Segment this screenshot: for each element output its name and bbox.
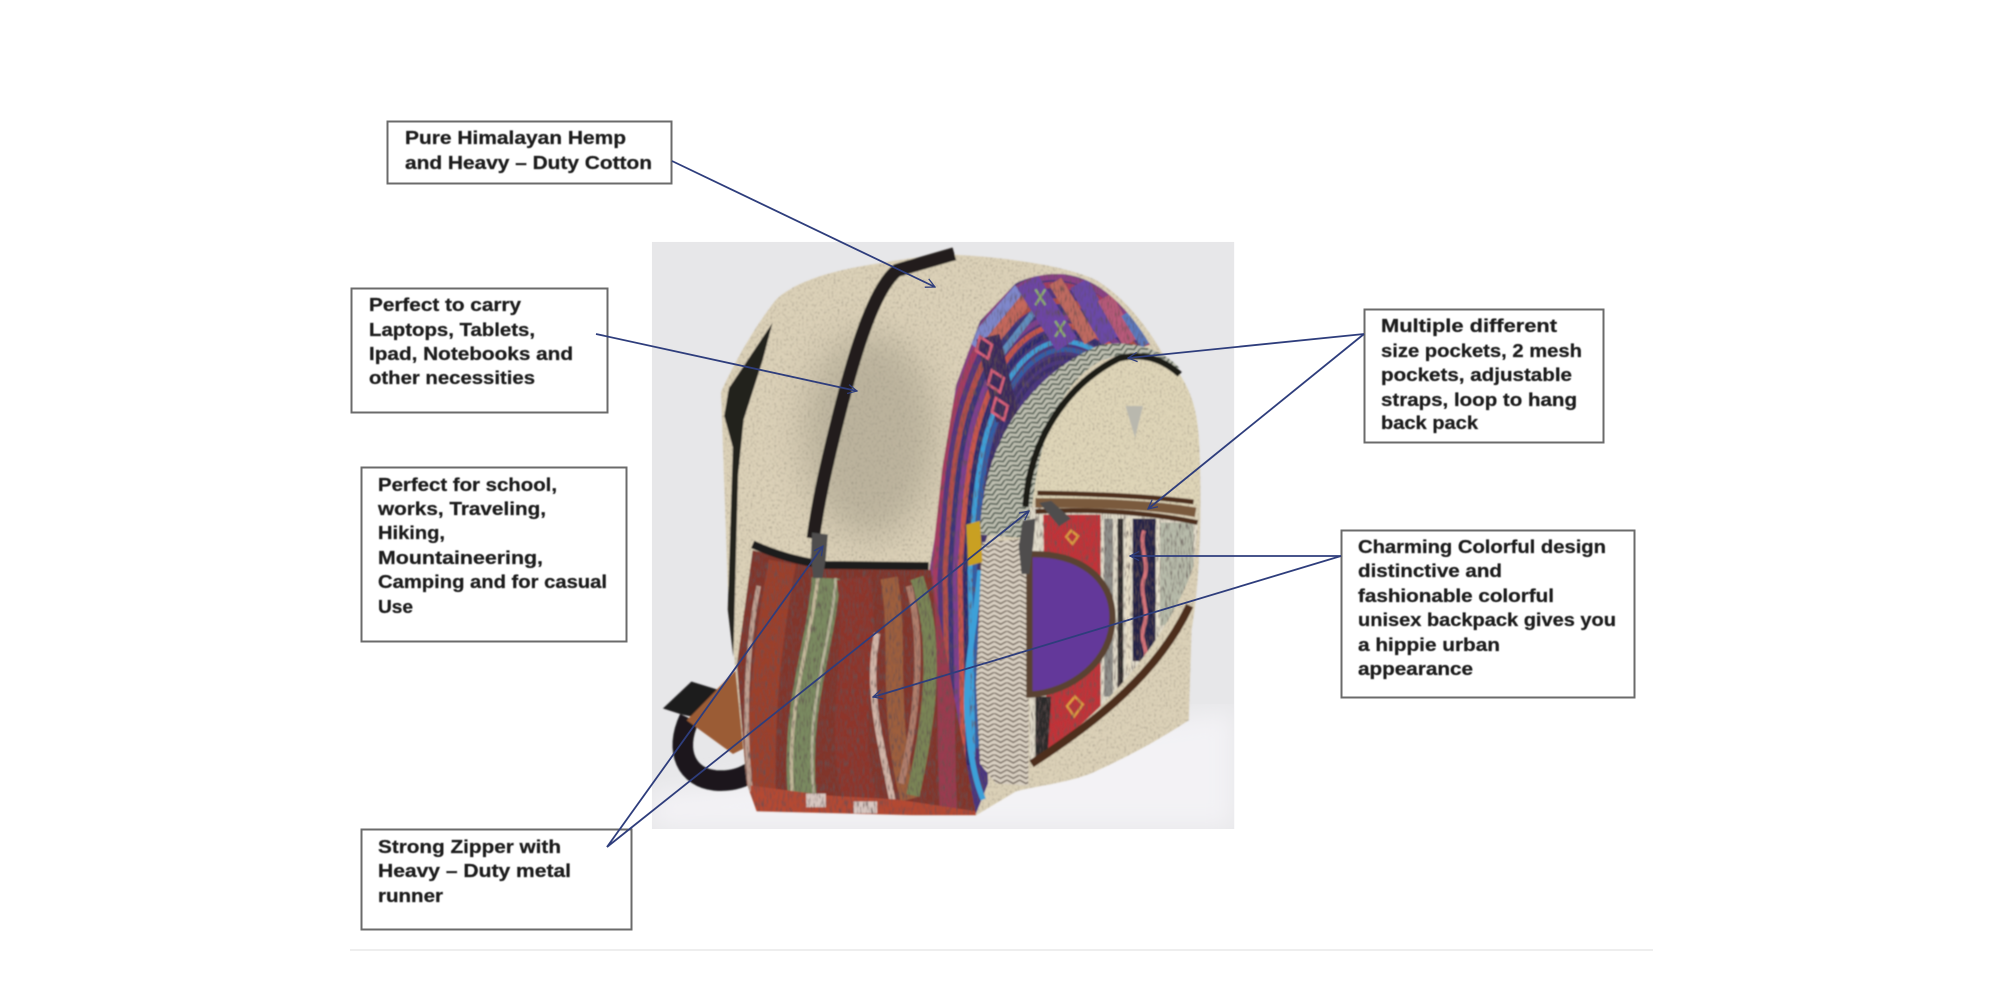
photo backdrop	[652, 242, 1234, 829]
callout: laptops and tablets: Laptops, Tablets,	[369, 320, 535, 340]
callout: colorful design	[1342, 530, 1634, 698]
callout: multiple pockets: Multiple different	[1381, 316, 1557, 336]
callout: school and travel uses: Perfect for school,	[378, 475, 557, 495]
lower front pocket	[1027, 503, 1201, 772]
callout: school and travel uses: Mountaineering,	[378, 548, 543, 568]
arrow: pockets to front zip	[1148, 334, 1364, 509]
side pocket zipper	[753, 544, 929, 566]
callout: laptops and tablets	[352, 288, 608, 412]
callout: strong zipper: runner	[378, 886, 443, 906]
back strap loop	[663, 667, 753, 781]
hemp body	[721, 255, 1201, 815]
callout: school and travel uses: works, Traveling,	[377, 499, 546, 519]
callout: school and travel uses	[362, 468, 626, 642]
callout: hemp and cotton: Pure Himalayan Hemp	[405, 128, 626, 148]
arrow: zipper to side puller	[607, 546, 823, 847]
callout: colorful design: a hippie urban	[1358, 635, 1500, 655]
arrow: pockets to top pocket	[1128, 334, 1364, 358]
callout: multiple pockets: size pockets, 2 mesh	[1381, 341, 1582, 361]
callout: school and travel uses: Camping and for casual	[378, 572, 607, 592]
photo: backpack	[652, 242, 1234, 829]
herringbone arch trim	[980, 343, 1180, 538]
callout: strong zipper	[362, 830, 632, 930]
callout: hemp and cotton	[388, 122, 672, 184]
purple half circle	[1029, 554, 1113, 695]
upper front pocket hemp	[1178, 374, 1199, 438]
callout: multiple pockets: straps, loop to hang	[1381, 390, 1577, 410]
tiny logo tag	[1126, 406, 1143, 438]
callout: strong zipper: Heavy – Duty metal	[378, 861, 571, 881]
arrow: colour design to mesh pocket	[873, 556, 1341, 697]
zipper pullers	[811, 501, 1071, 578]
arrow: zipper to pocket puller	[607, 511, 1029, 847]
gusset lower blue overlay	[967, 570, 983, 799]
arrow: laptops to main compartment	[596, 334, 857, 391]
callout: colorful design: distinctive and	[1358, 561, 1502, 581]
mesh side pocket	[731, 546, 980, 823]
callout: multiple pockets	[1364, 310, 1604, 442]
callout: colorful design: unisex backpack gives you	[1358, 610, 1616, 630]
main zipper	[813, 254, 954, 538]
arrow: hemp to main panel	[672, 161, 935, 287]
callout: multiple pockets: pockets, adjustable	[1381, 365, 1572, 385]
callout: school and travel uses: Hiking,	[378, 523, 445, 543]
callout: colorful design: Charming Colorful design	[1358, 537, 1606, 557]
callout: colorful design: appearance	[1358, 659, 1473, 679]
callout: colorful design: fashionable colorful	[1358, 586, 1554, 606]
callout: laptops and tablets: other necessities	[369, 368, 535, 388]
herringbone lower trim	[976, 538, 1029, 786]
callout: laptops and tablets: Ipad, Notebooks and	[369, 344, 573, 364]
grey weave shading on main panel	[802, 333, 937, 538]
callout: strong zipper: Strong Zipper with	[378, 837, 561, 857]
arrow: colour design to front pocket	[1130, 555, 1341, 557]
brown pocket zip trim	[1031, 493, 1198, 764]
black back padding	[724, 323, 772, 657]
arrows: callouts to backpack features	[596, 161, 1364, 847]
callout: multiple pockets: back pack	[1381, 413, 1479, 433]
callout: school and travel uses: Use	[378, 597, 413, 617]
yellow tag	[966, 521, 982, 566]
colourful gusset stripes	[928, 273, 1150, 814]
callout: hemp and cotton: and Heavy – Duty Cotton	[405, 153, 652, 173]
callout: laptops and tablets: Perfect to carry	[369, 295, 521, 315]
pocket zip arc	[1026, 356, 1180, 507]
